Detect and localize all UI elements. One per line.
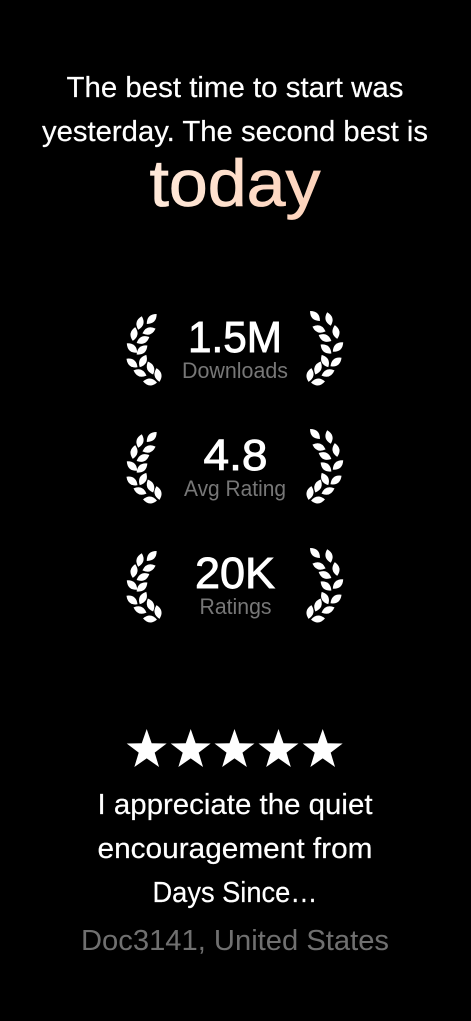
title line 1: The best time to start was: [66, 72, 404, 104]
label: Ratings: Ratings: [200, 594, 272, 619]
stat: downloads: [124, 309, 346, 386]
value: 20K: 20K: [195, 549, 275, 598]
value: 4.8: 4.8: [204, 431, 268, 480]
title line 2: yesterday. The second best is: [42, 116, 428, 148]
highlighted word: today: today: [150, 146, 320, 220]
attribution: Doc3141, United States: [81, 925, 389, 957]
icon: five star rating: [127, 729, 343, 767]
testimonial quote: [98, 789, 372, 909]
icon: right laurel: [305, 309, 346, 386]
icon: left laurel: [124, 312, 163, 386]
stat: average rating: [124, 427, 346, 504]
icon: right laurel: [305, 427, 346, 504]
value: 1.5M: 1.5M: [188, 313, 282, 362]
quote line 3: Days Since…: [152, 877, 318, 909]
label: Avg Rating: Avg Rating: [184, 476, 286, 501]
stat: ratings count: [124, 546, 346, 623]
icon: left laurel: [124, 549, 163, 623]
quote line 1: I appreciate the quiet: [98, 789, 372, 821]
title: [42, 72, 428, 220]
quote line 2: encouragement from: [98, 833, 372, 865]
icon: right laurel: [305, 546, 346, 623]
icon: left laurel: [124, 430, 163, 504]
label: Downloads: Downloads: [182, 358, 288, 383]
